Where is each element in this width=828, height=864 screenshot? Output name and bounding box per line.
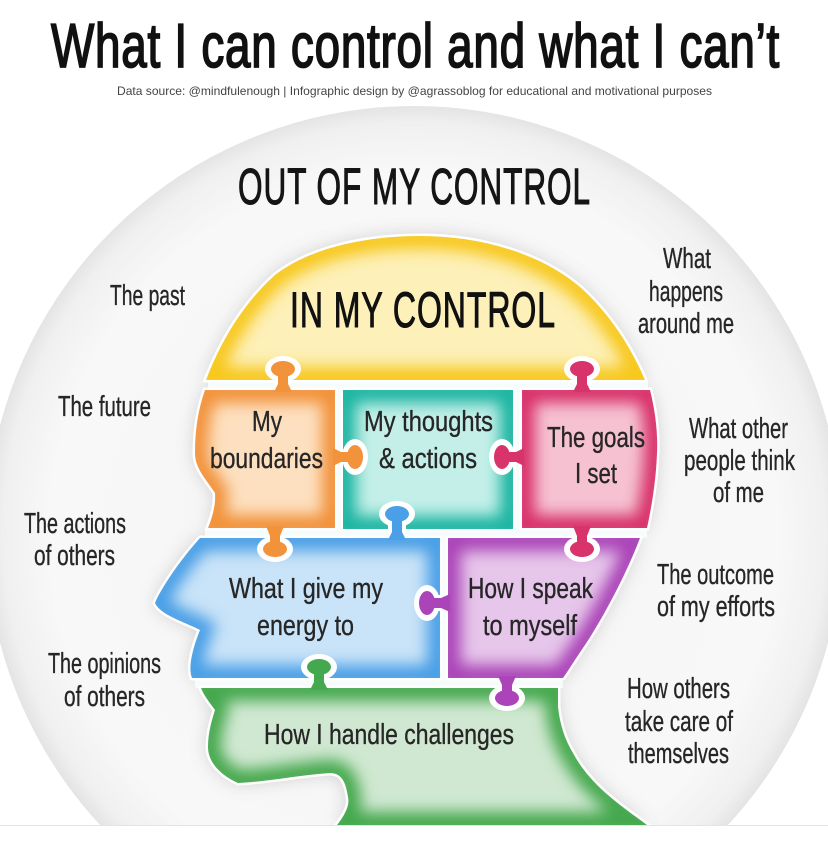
label: my boundaries: My — [252, 406, 282, 438]
knob: orange right into teal — [333, 439, 368, 475]
panel: yellow puzzle piece, in my control — [206, 236, 645, 380]
label: what I give my energy to: What I give my — [229, 573, 383, 605]
label: the goals I set — [547, 422, 645, 490]
data source line: Data source: @mindfulenough | Infographic design by @agrassoblog for educational and motivational purposes — [117, 84, 712, 98]
white gaps between puzzle pieces — [195, 380, 648, 688]
label: my boundaries — [210, 406, 323, 475]
label: how others take care of themselves: How others — [627, 673, 730, 705]
knob: orange up into yellow — [265, 356, 301, 392]
label: my thoughts and actions: My thoughts — [364, 406, 493, 438]
label: what I give my energy to — [229, 573, 383, 642]
label: how others take care of themselves — [625, 673, 734, 770]
head drop shadow — [155, 236, 657, 825]
knob: orange down into blue — [257, 526, 293, 562]
label: how I speak to myself: to myself — [483, 610, 578, 642]
knob: pink down into purple — [564, 526, 600, 562]
label: what happens around me: around me — [638, 308, 734, 340]
panel: green puzzle piece, how I handle challenges — [201, 688, 647, 825]
label: the opinions of others: The opinions — [48, 648, 161, 680]
label: what happens around me: What — [663, 243, 711, 275]
knob: pink up into yellow — [564, 356, 600, 392]
knob: pink left into teal — [489, 439, 524, 475]
label: what other people think of me: What other — [689, 413, 788, 445]
label: the future: The future — [58, 391, 151, 423]
label: the actions of others: The actions — [24, 508, 126, 540]
heading: in my control: IN MY CONTROL — [290, 282, 556, 338]
label: how others take care of themselves: themselves — [628, 738, 729, 770]
label: my thoughts and actions — [364, 406, 493, 475]
label: the opinions of others — [48, 648, 161, 713]
label: the actions of others — [24, 508, 126, 572]
label: the past: The past — [110, 280, 185, 312]
panel: orange puzzle piece, my boundaries — [195, 390, 335, 528]
label: the goals I set: I set — [575, 458, 617, 490]
label: how I speak to myself — [468, 573, 593, 642]
label: the actions of others: of others — [34, 540, 115, 572]
label: what other people think of me — [684, 413, 795, 509]
label: how others take care of themselves: take care of — [625, 706, 734, 738]
panel: teal puzzle piece, my thoughts and actions — [343, 390, 513, 529]
label: how I speak to myself: How I speak — [468, 573, 593, 605]
label: how I handle challenges: How I handle challenges — [264, 719, 514, 751]
label: the outcome of my efforts: of my efforts — [657, 591, 775, 623]
label: what I give my energy to: energy to — [257, 610, 354, 642]
label: the opinions of others: of others — [64, 681, 145, 713]
heading: out of my control: OUT OF MY CONTROL — [238, 158, 591, 215]
label: the outcome of my efforts: The outcome — [657, 559, 774, 591]
label: the goals I set: The goals — [547, 422, 645, 454]
panel: purple puzzle piece, how I speak to myself — [448, 538, 640, 678]
knob: purple left into blue — [414, 585, 450, 621]
panel: blue puzzle piece, what I give my energy to — [155, 538, 440, 678]
label: the outcome of my efforts — [657, 559, 775, 623]
label: what happens around me — [638, 243, 734, 340]
panel: pink puzzle piece, the goals I set — [522, 390, 657, 528]
knob: blue up into teal — [379, 501, 415, 540]
label: my boundaries: boundaries — [210, 443, 323, 475]
label: what happens around me: happens — [649, 276, 723, 308]
knob: green up into blue — [301, 654, 337, 690]
label: my thoughts and actions: & actions — [379, 443, 477, 475]
label: what other people think of me: of me — [713, 477, 764, 509]
knob: purple down into green — [489, 676, 525, 711]
